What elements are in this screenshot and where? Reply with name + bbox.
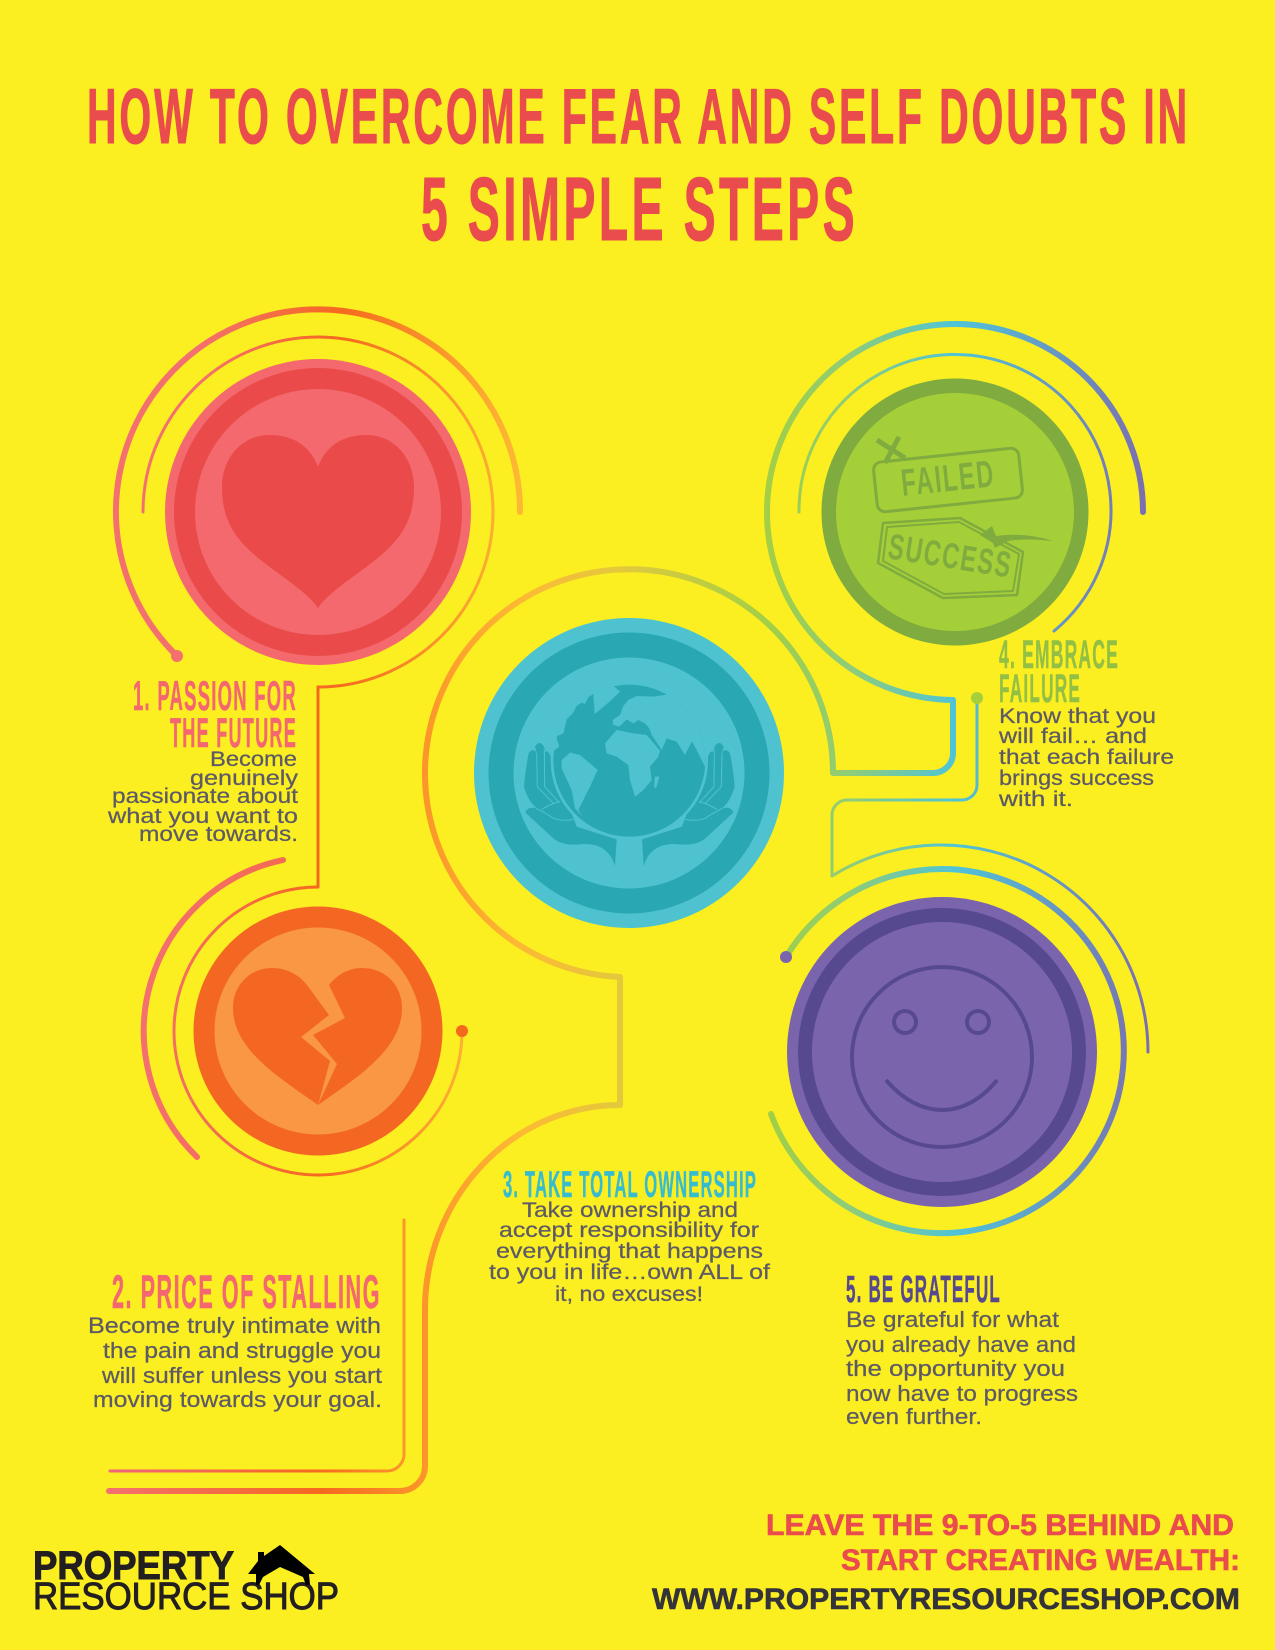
step 3 body: it, no excuses! [555,1283,703,1306]
text: 1. PASSION FOR [133,672,297,719]
call to action [652,1509,1240,1616]
step 5 body: even further. [846,1404,982,1429]
text: 3. TAKE TOTAL OWNERSHIP [503,1164,757,1205]
step 3 body: accept responsibility for [499,1219,759,1242]
step 5 body: the opportunity you [846,1356,1065,1381]
step 1 body: Become [210,748,297,771]
call to action: WWW.PROPERTYRESOURCESHOP.COM [652,1583,1240,1616]
step 4 text [998,633,1174,811]
step 2 body: the pain and struggle you [103,1338,381,1363]
step 2 body: will suffer unless you start [101,1363,382,1388]
call to action: LEAVE THE 9-TO-5 BEHIND AND [766,1509,1234,1542]
step 2 text [88,1265,382,1412]
step 4 text: 4. EMBRACE [999,633,1119,677]
step 5 body [846,1307,1078,1429]
step 4 body: brings success [999,767,1154,790]
icon: broken heart circle [194,906,442,1156]
step 4 heading: FAILURE [999,667,1081,711]
connector lines: step 3, 4 and 5 [109,324,1148,1491]
step 3 body: everything that happens [496,1240,763,1263]
step 4 body: that each failure [999,746,1174,769]
icon: failed and success stamps circle: FAILED [899,453,997,505]
icon: failed and success stamps circle: SUCCESS [885,526,1015,586]
dot: step 1 [171,650,183,662]
step 4 body [998,705,1174,811]
step 5 body: Be grateful for what [846,1307,1059,1332]
connector lines: step 1 and 2 [110,309,520,1471]
step 4 body: with it. [998,788,1073,811]
text: THE FUTURE [170,709,297,756]
step 5 body: you already have and [846,1332,1076,1357]
step 2 body [88,1313,382,1412]
step 5 text [846,1269,1078,1429]
call to action: START CREATING WEALTH: [841,1544,1240,1577]
step 1 body [107,748,299,846]
step 1 body: what you want to [107,805,298,828]
step 1 text [107,672,299,846]
step 5 text: 5. BE GRATEFUL [846,1269,1001,1311]
icon: globe in hands circle [474,618,784,928]
step 1 body: passionate about [112,785,298,808]
step 3 body: Take ownership and [522,1199,738,1222]
dot: step 5 [780,951,792,963]
title: 5 SIMPLE STEPS [421,160,858,260]
logo: property resource shop: PROPERTY [33,1544,234,1588]
icon: heart circle [165,359,471,665]
dot: step 2 [456,1025,468,1037]
title [87,72,1190,260]
step 3 body: to you in life…own ALL of [489,1261,770,1284]
icon: failed and success stamps circle [822,378,1088,646]
icon: smiley circle [787,897,1097,1207]
step 4 body: will fail… and [998,725,1147,748]
step 4 heading [999,633,1119,711]
step 1 body: move towards. [139,823,298,846]
step 2 body: Become truly intimate with [88,1313,381,1338]
step 2 body: moving towards your goal. [93,1387,382,1412]
logo: property resource shop: RESOURCE SHOP [33,1576,339,1618]
step 1 body: genuinely [190,767,299,790]
step 1 heading [133,672,297,756]
icon: house roof [248,1545,315,1585]
dot: step 4 [971,692,983,704]
step 3 body [489,1199,770,1306]
step 5 body: now have to progress [846,1381,1078,1406]
step 4 body: Know that you [999,705,1156,728]
text: 2. PRICE OF STALLING [112,1265,381,1318]
logo: property resource shop [33,1544,339,1618]
step 3 text [489,1164,770,1306]
